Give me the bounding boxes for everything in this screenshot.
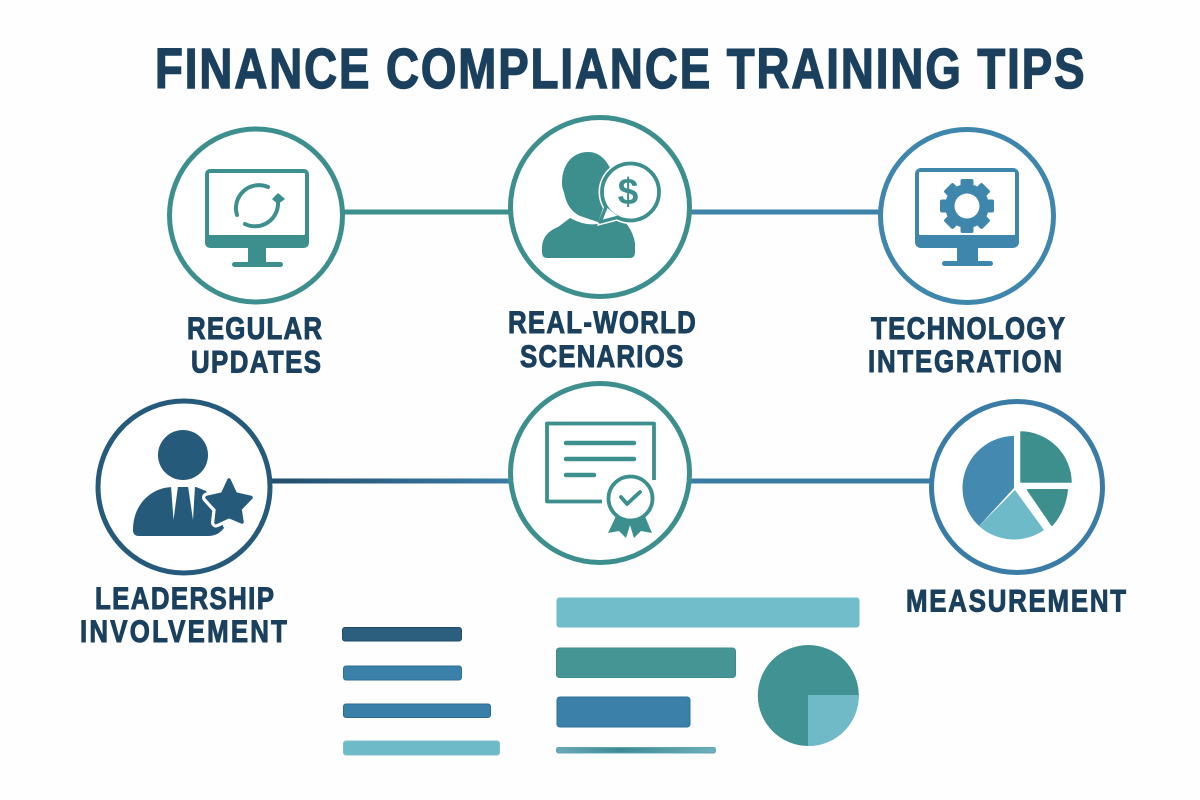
- icon: certificate with seal: [547, 424, 654, 538]
- chart: large horizontal bars: [556, 598, 860, 753]
- icon: person with dollar speech bubble: [542, 152, 662, 258]
- circle outline: [932, 402, 1102, 572]
- label: real-world scenarios: [508, 306, 696, 375]
- circle outline: [170, 129, 342, 302]
- icon: monitor with refresh arrows: [205, 169, 309, 267]
- panel: technology integration: [868, 130, 1065, 380]
- label: measurement: MEASUREMENT: [906, 584, 1126, 619]
- panel: leadership involvement: [80, 401, 287, 650]
- icon: pie chart: [962, 432, 1071, 540]
- icon: person with dollar speech bubble: $: [618, 171, 639, 212]
- connector: real-world scenarios to technology integration: [690, 210, 880, 214]
- title: FINANCE COMPLIANCE TRAINING TIPS: [155, 36, 1085, 100]
- icon: leader with star: [133, 430, 251, 536]
- panel: real-world scenarios: [508, 118, 696, 375]
- panel: certificate: [510, 384, 690, 562]
- connector: certificate to measurement: [690, 478, 931, 484]
- connector: leadership involvement to certificate: [271, 478, 510, 484]
- label: leadership involvement: INVOLVEMENT: [80, 615, 287, 650]
- circle outline: [880, 130, 1054, 302]
- panel: measurement: [906, 402, 1126, 619]
- icon: monitor with gear: [915, 168, 1019, 266]
- label: technology integration: INTEGRATION: [868, 345, 1062, 380]
- circle outline: [510, 384, 690, 562]
- circle outline: [98, 401, 270, 573]
- label: leadership involvement: [80, 582, 287, 650]
- label: technology integration: TECHNOLOGY: [871, 312, 1065, 347]
- chart: small horizontal bars: [342, 628, 500, 755]
- label: regular updates: [187, 312, 322, 380]
- label: leadership involvement: LEADERSHIP: [95, 582, 274, 617]
- chart: decorative pie: [758, 645, 859, 746]
- label: technology integration: [868, 312, 1065, 380]
- connector: regular updates to real-world scenarios: [343, 210, 510, 214]
- label: regular updates: REGULAR: [187, 312, 322, 347]
- circle outline: [510, 118, 690, 296]
- label: real-world scenarios: SCENARIOS: [520, 340, 683, 375]
- label: regular updates: UPDATES: [191, 345, 321, 380]
- panel: regular updates: [170, 129, 342, 380]
- label: real-world scenarios: REAL-WORLD: [508, 306, 696, 341]
